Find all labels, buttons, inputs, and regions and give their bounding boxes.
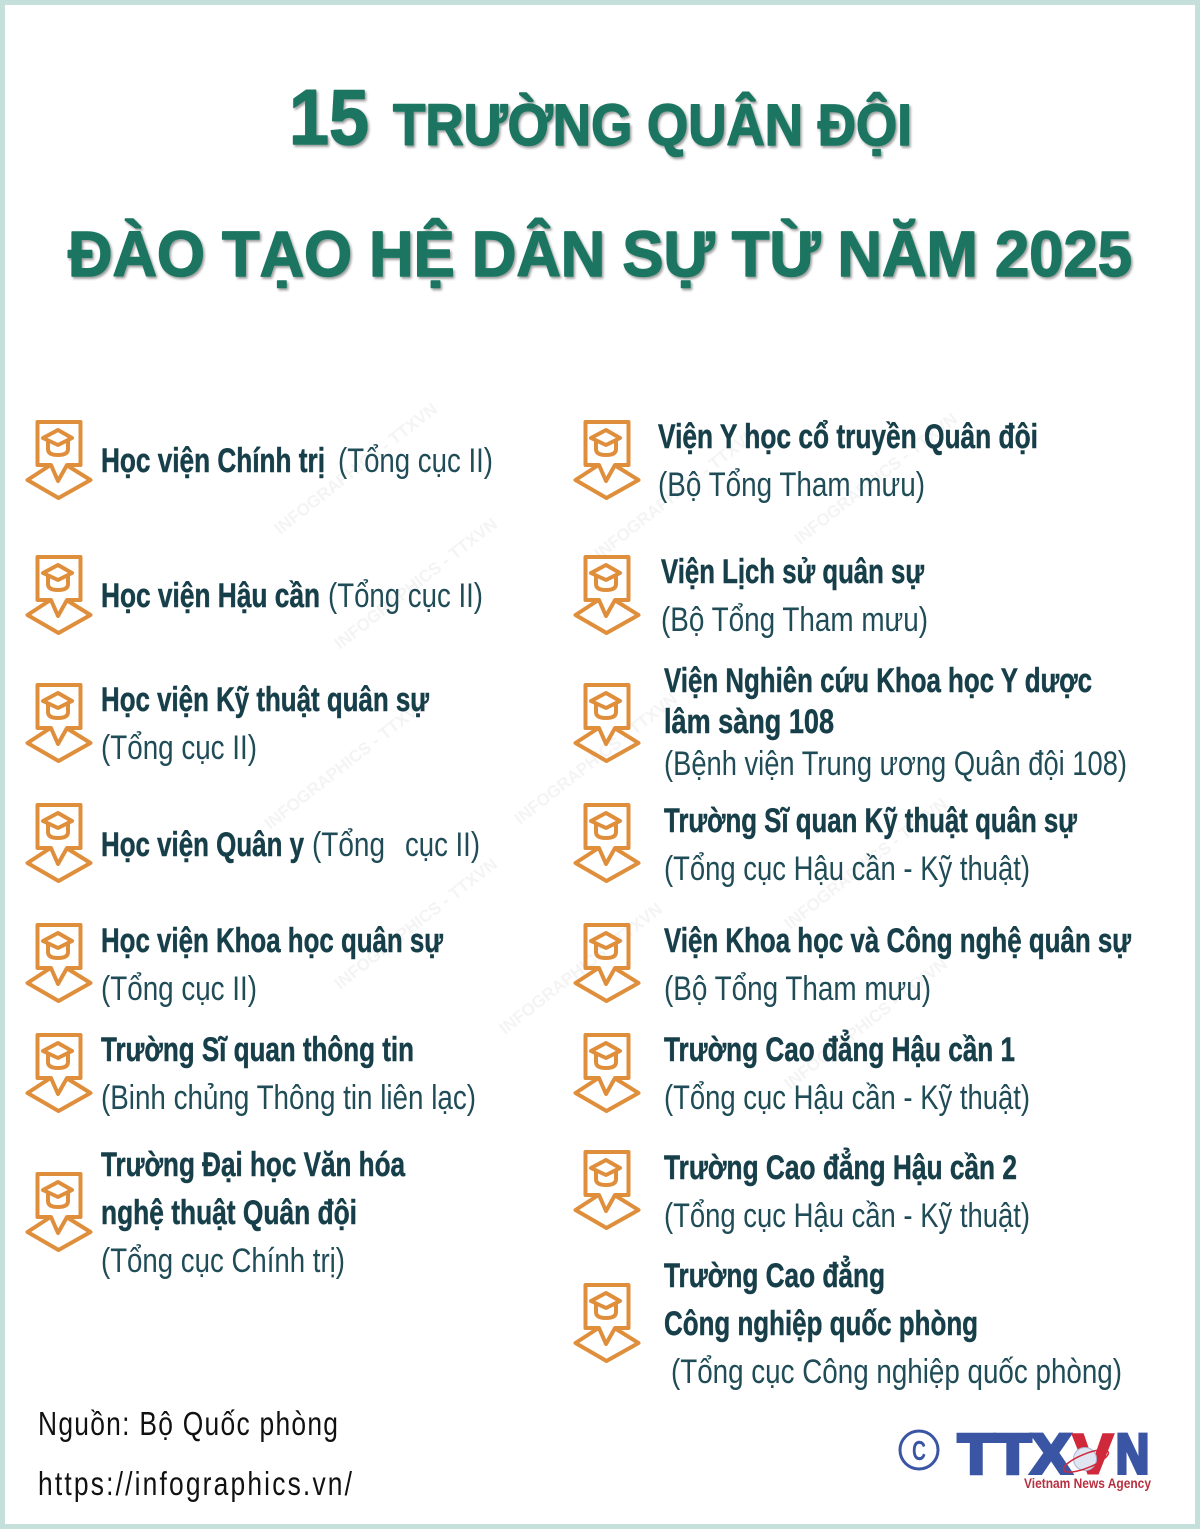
- text: INFOGRAPHICS - TTXVN: [781, 954, 951, 1093]
- text: INFOGRAPHICS - TTXVN: [496, 899, 666, 1038]
- item: Viện Khoa học và Công nghệ quân sự: (Bộ Tổng Tham mưu): [664, 970, 931, 1008]
- logo: copyright and TTXVN: V: [1073, 1422, 1113, 1485]
- item: Học viện Khoa học quân sự: (Tổng cục II): [101, 970, 257, 1008]
- logo: copyright and TTXVN: Vietnam News Agency: [1024, 1476, 1151, 1491]
- item: Trường Cao đẳng Công nghiệp quốc phòng: Công nghiệp quốc phòng: [664, 1305, 978, 1343]
- item: Viện Lịch sử quân sự: (Bộ Tổng Tham mưu): [661, 601, 928, 639]
- item: Học viện Quân y: Học viện Quân y: [101, 826, 304, 864]
- logo: copyright and TTXVN: C: [912, 1435, 926, 1466]
- item: Học viện Chính trị: Học viện Chính trị: [101, 442, 325, 480]
- item: Trường Cao đẳng Hậu cần 2: Trường Cao đẳng Hậu cần 2: [664, 1148, 1017, 1187]
- item: Trường Cao đẳng Hậu cần 1: (Tổng cục Hậu cần - Kỹ thuật): [664, 1079, 1030, 1117]
- item: Trường Đại học Văn hóa nghệ thuật Quân đội: nghệ thuật Quân đội: [101, 1194, 357, 1232]
- item: Trường Cao đẳng Công nghiệp quốc phòng: Trường Cao đẳng: [664, 1256, 885, 1295]
- item: Học viện Hậu cần: [28, 557, 483, 633]
- text: INFOGRAPHICS - TTXVN: [781, 794, 951, 933]
- item: Học viện Chính trị: [28, 422, 493, 498]
- item: Viện Nghiên cứu Khoa học Y dược lâm sàng 108: lâm sàng 108: [664, 703, 834, 741]
- item: Học viện Chính trị: (Tổng cục II): [338, 442, 493, 480]
- item: Trường Đại học Văn hóa nghệ thuật Quân đội: (Tổng cục Chính trị): [101, 1242, 345, 1280]
- title: 15: [289, 73, 369, 161]
- item: Học viện Quân y: cục II): [405, 826, 480, 864]
- logo: copyright and TTXVN: [900, 1422, 1151, 1491]
- text: INFOGRAPHICS - TTXVN: [331, 514, 501, 653]
- source text: https://infographics.vn/: [38, 1466, 353, 1503]
- item: Học viện Kỹ thuật quân sự: (Tổng cục II): [101, 729, 257, 767]
- item: Học viện Kỹ thuật quân sự: [28, 681, 429, 767]
- item: Trường Cao đẳng Hậu cần 1: [576, 1030, 1030, 1117]
- item: Trường Sĩ quan Kỹ thuật quân sự: [576, 802, 1077, 888]
- item: Trường Sĩ quan Kỹ thuật quân sự: Trường Sĩ quan Kỹ thuật quân sự: [664, 802, 1077, 840]
- source text: Nguồn: Bộ Quốc phòng: [38, 1406, 338, 1443]
- item: Học viện Quân y: [28, 805, 480, 881]
- item: Học viện Hậu cần: (Tổng cục II): [328, 577, 483, 615]
- item: Trường Sĩ quan Kỹ thuật quân sự: (Tổng cục Hậu cần - Kỹ thuật): [664, 850, 1030, 888]
- item: Trường Sĩ quan thông tin: (Binh chủng Thông tin liên lạc): [101, 1079, 476, 1117]
- item: Trường Đại học Văn hóa nghệ thuật Quân đội: Trường Đại học Văn hóa: [101, 1146, 406, 1184]
- text: INFOGRAPHICS - TTXVN: [591, 424, 761, 563]
- text: INFOGRAPHICS - TTXVN: [331, 854, 501, 993]
- item: Học viện Quân y: (Tổng: [312, 826, 385, 864]
- right column: [576, 418, 1131, 1391]
- item: Viện Khoa học và Công nghệ quân sự: [576, 922, 1131, 1008]
- text: INFOGRAPHICS - TTXVN: [271, 399, 441, 538]
- item: Viện Y học cổ truyền Quân đội: [576, 418, 1038, 504]
- item: Viện Y học cổ truyền Quân đội: (Bộ Tổng Tham mưu): [658, 466, 925, 504]
- item: Học viện Kỹ thuật quân sự: Học viện Kỹ thuật quân sự: [101, 681, 429, 719]
- text: INFOGRAPHICS - TTXVN: [261, 694, 431, 833]
- item: Học viện Khoa học quân sự: Học viện Khoa học quân sự: [101, 922, 443, 960]
- item: Viện Nghiên cứu Khoa học Y dược lâm sàng 108: [576, 662, 1127, 783]
- item: Trường Sĩ quan thông tin: [28, 1031, 476, 1117]
- text: INFOGRAPHICS - TTXVN: [791, 409, 961, 548]
- item: Viện Lịch sử quân sự: Viện Lịch sử quân sự: [661, 553, 924, 591]
- title: [68, 73, 1132, 290]
- item: Viện Lịch sử quân sự: [576, 553, 928, 639]
- title: ĐÀO TẠO HỆ DÂN SỰ TỪ NĂM 2025: [68, 217, 1132, 290]
- item: Học viện Khoa học quân sự: [28, 922, 443, 1008]
- logo: copyright and TTXVN: N: [1116, 1422, 1149, 1485]
- text: INFOGRAPHICS - TTXVN: [511, 689, 681, 828]
- item: Viện Y học cổ truyền Quân đội: Viện Y học cổ truyền Quân đội: [658, 418, 1038, 456]
- item: Trường Đại học Văn hóa nghệ thuật Quân đội: [28, 1146, 406, 1280]
- item: Trường Cao đẳng Hậu cần 2: (Tổng cục Hậu cần - Kỹ thuật): [664, 1197, 1030, 1235]
- item: Trường Cao đẳng Công nghiệp quốc phòng: [576, 1256, 1122, 1391]
- logo: copyright and TTXVN: TTX: [958, 1422, 1071, 1485]
- title: TRƯỜNG QUÂN ĐỘI: [393, 93, 912, 158]
- item: Trường Cao đẳng Hậu cần 1: Trường Cao đẳng Hậu cần 1: [664, 1030, 1015, 1069]
- item: Trường Cao đẳng Hậu cần 2: [576, 1148, 1030, 1235]
- item: Trường Sĩ quan thông tin: Trường Sĩ quan thông tin: [101, 1031, 414, 1069]
- item: Học viện Hậu cần: Học viện Hậu cần: [101, 577, 320, 615]
- left column: [28, 422, 493, 1280]
- source text: [38, 1406, 353, 1503]
